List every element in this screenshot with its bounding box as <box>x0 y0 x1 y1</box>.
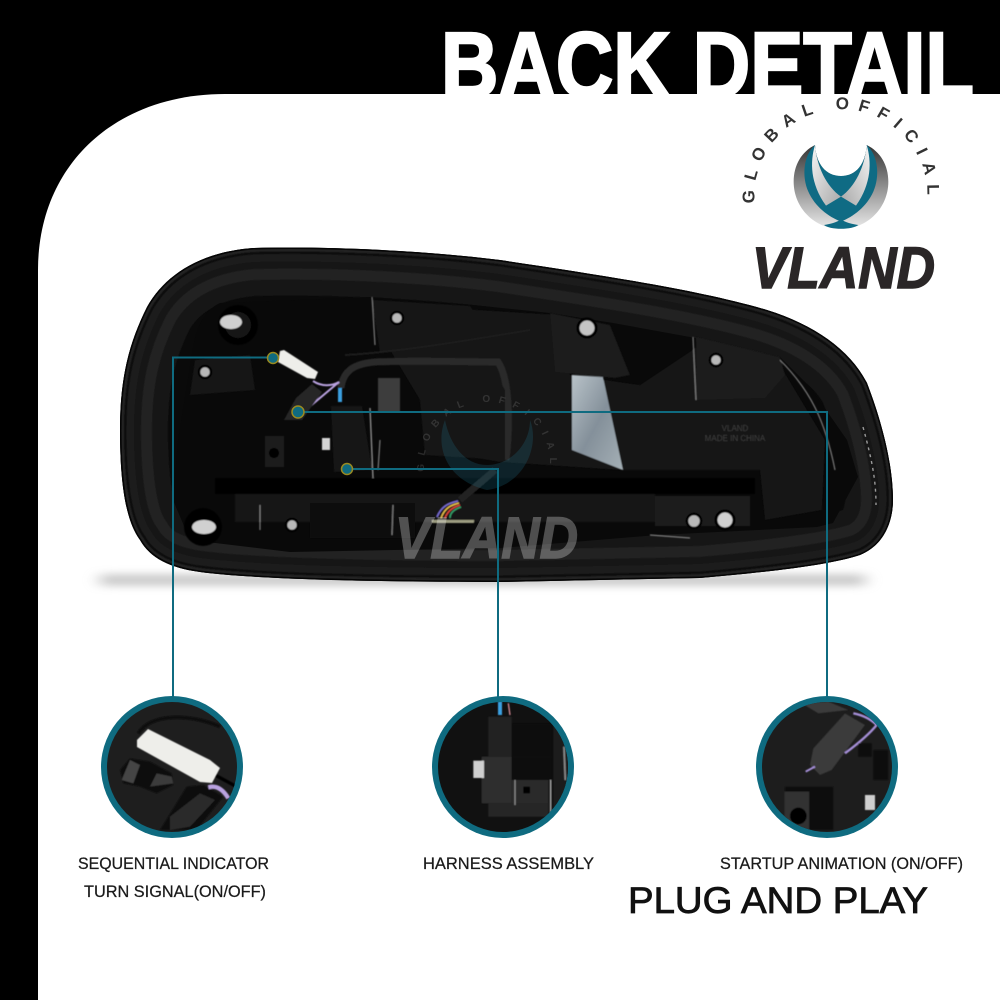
label: harness assembly: HARNESS ASSEMBLY <box>423 854 594 873</box>
highlight edges <box>260 297 835 538</box>
callout dot: startup <box>292 406 304 418</box>
silver plate <box>572 375 623 470</box>
label: sequential indicator: SEQUENTIAL INDICATOR <box>78 854 269 873</box>
moulded text: VLAND <box>722 424 749 433</box>
watermark wordmark: VLAND <box>395 506 578 571</box>
callout dot: harness <box>342 464 352 474</box>
lamp back panel <box>173 297 858 552</box>
watermark emblem: GLOBAL OFFICIAL <box>417 395 557 472</box>
black connectors <box>284 384 322 420</box>
label: startup animation: STARTUP ANIMATION (ON/OFF) <box>720 854 963 873</box>
studs <box>218 305 258 345</box>
inset: sequential indicator <box>100 695 245 840</box>
blue wire <box>338 388 342 402</box>
rainbow cable bundle <box>437 501 461 518</box>
logo emblem <box>794 145 888 229</box>
callout lines <box>173 358 827 697</box>
lighter housing sections <box>390 305 825 520</box>
arc text: global official: GLOBAL OFFICIAL <box>742 97 939 203</box>
label: plug and play: PLUG AND PLAY <box>628 880 928 921</box>
floor reflection <box>100 574 865 586</box>
bolts <box>199 312 722 531</box>
connector: white indicator plug <box>278 350 318 379</box>
brand logo <box>742 97 939 301</box>
inset: startup animation <box>755 695 900 840</box>
lamp seal <box>120 248 893 582</box>
inset: harness assembly <box>430 695 575 840</box>
dark ledge <box>215 478 755 494</box>
tail lamp back: MADE IN CHINA <box>705 434 766 443</box>
wordmark: VLAND <box>752 236 935 301</box>
wiring harness <box>341 361 508 460</box>
label: turn signal: TURN SIGNAL(ON/OFF) <box>84 882 266 901</box>
callout dot: indicator <box>268 352 278 364</box>
purple wires <box>308 381 339 408</box>
tail lamp back <box>120 248 893 582</box>
